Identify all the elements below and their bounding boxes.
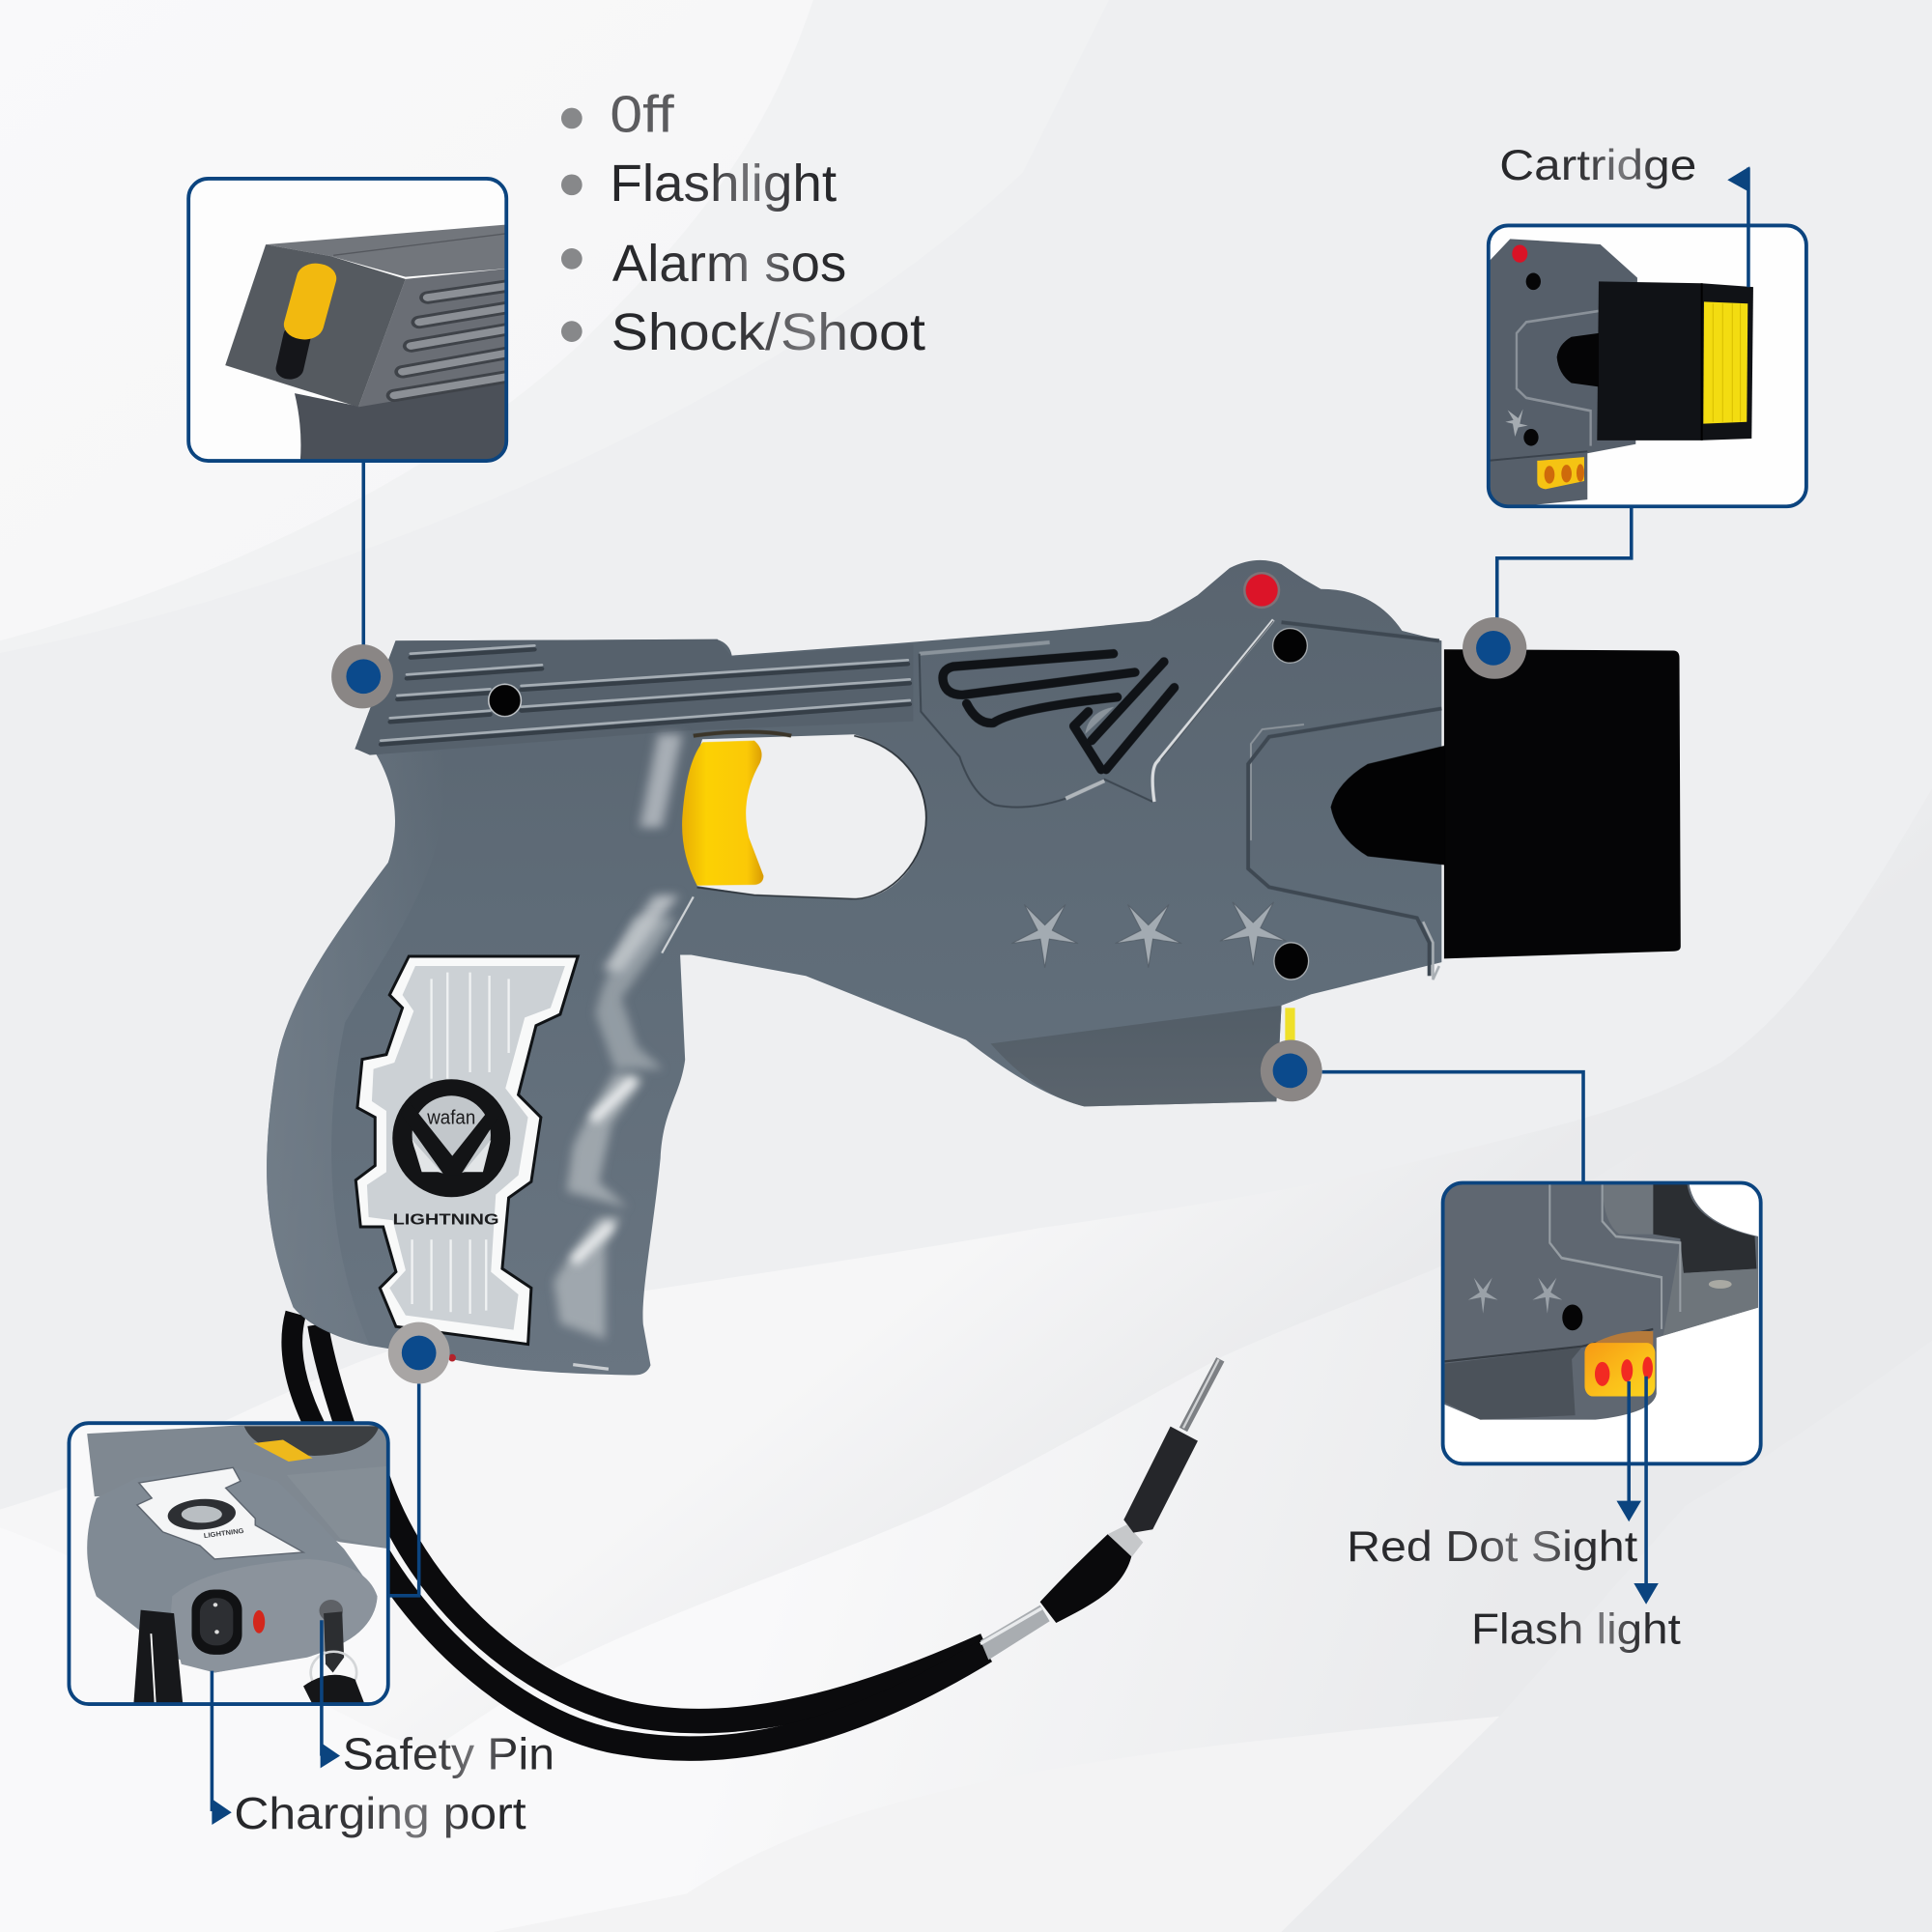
port bbox=[191, 1590, 242, 1655]
trigger hole bbox=[244, 1426, 379, 1456]
mode: shock: Shock/Shoot bbox=[611, 304, 925, 361]
rear slide hole bbox=[489, 684, 521, 717]
bullets bbox=[561, 108, 582, 342]
arrow: charging port bbox=[212, 1671, 232, 1825]
wing strokes bbox=[943, 654, 1175, 770]
marker: flash bbox=[1261, 1040, 1322, 1101]
top surface bbox=[266, 224, 511, 277]
silver badge: LIGHTNING bbox=[393, 1211, 499, 1228]
trigger highlights bbox=[603, 734, 682, 973]
body shell bbox=[267, 560, 1441, 1375]
lower underbody bbox=[991, 1006, 1282, 1106]
rib panel bbox=[358, 269, 511, 407]
connector: cartridge bbox=[1497, 508, 1632, 622]
lamp bbox=[1537, 457, 1584, 489]
stun gun body bbox=[267, 560, 1445, 1375]
front raised panel bbox=[1248, 622, 1441, 976]
yellow switch bbox=[284, 263, 336, 340]
red dot bbox=[1512, 244, 1527, 263]
notch bbox=[1557, 333, 1599, 386]
slide and trigger guard detail bbox=[355, 639, 926, 973]
mode: off: 0ff bbox=[610, 86, 674, 143]
slot bbox=[276, 330, 311, 380]
lit lamp bbox=[1584, 1343, 1655, 1397]
front face bbox=[225, 244, 406, 407]
connector: switch bbox=[362, 462, 365, 648]
inset panel: charging port: LIGHTNING bbox=[203, 1526, 244, 1540]
lanyard end fittings bbox=[980, 1359, 1220, 1660]
lamp glow bbox=[1592, 1331, 1653, 1347]
holes bbox=[1273, 629, 1309, 980]
body bbox=[1439, 1179, 1758, 1420]
label: red dot sight: Red Dot Sight bbox=[1347, 1523, 1638, 1571]
grip rear shading bbox=[267, 752, 445, 1346]
arrow: red dot sight bbox=[1616, 1381, 1641, 1521]
flashlight edge bbox=[1285, 1008, 1295, 1042]
grip texture bbox=[554, 918, 676, 1369]
silver crease bbox=[1152, 620, 1273, 802]
mode: alarm: Alarm sos bbox=[612, 236, 846, 293]
badge bbox=[137, 1467, 303, 1559]
safety pin bbox=[319, 1600, 343, 1622]
silver badge: wafan bbox=[426, 1106, 475, 1128]
connector: flash bbox=[1322, 1072, 1583, 1182]
mini clip bbox=[1709, 1280, 1732, 1289]
gray housing bbox=[1488, 239, 1637, 505]
inset panel: cartridge bbox=[1488, 225, 1806, 506]
label: charging port: Charging port bbox=[234, 1788, 526, 1838]
arrow: safety pin bbox=[321, 1620, 340, 1768]
label: cartridge: Cartridge bbox=[1499, 142, 1696, 189]
bottom shade bbox=[1445, 1348, 1582, 1420]
lanyard cord bbox=[292, 1314, 1220, 1748]
arrow: cartridge bbox=[1727, 166, 1749, 287]
cartridge (main device) bbox=[1444, 649, 1681, 958]
yellow probes bbox=[1703, 301, 1747, 424]
red indicator bbox=[1243, 572, 1280, 609]
black block bbox=[1597, 281, 1753, 440]
raised panel bbox=[1517, 311, 1599, 446]
muzzle notch bbox=[1331, 746, 1445, 865]
panel edge bbox=[1549, 1182, 1680, 1329]
inset panel: charging port bbox=[69, 1423, 390, 1708]
frame panel bbox=[287, 1466, 390, 1548]
mode list bbox=[561, 86, 925, 361]
emblem and wing bbox=[920, 620, 1304, 840]
inset panel: selector switch bbox=[188, 179, 511, 463]
lower right frame bbox=[1663, 1243, 1758, 1336]
marker: base bbox=[388, 1322, 450, 1383]
trigger bbox=[682, 741, 763, 886]
arrow: flash light bbox=[1634, 1377, 1659, 1605]
trigger bbox=[253, 1439, 313, 1462]
slide band bbox=[355, 639, 913, 755]
stars bbox=[1011, 902, 1287, 968]
butt bbox=[170, 1559, 378, 1672]
red pin tip bbox=[448, 1354, 456, 1361]
marker: cartridge bbox=[1463, 617, 1526, 679]
label: safety pin: Safety Pin bbox=[343, 1729, 554, 1779]
charge led bbox=[253, 1610, 265, 1634]
grip bbox=[87, 1495, 377, 1673]
hole rear edge bbox=[697, 736, 926, 899]
label: flash light: Flash light bbox=[1471, 1606, 1681, 1654]
grip below switch bbox=[295, 384, 504, 460]
front panel corner bbox=[1251, 724, 1304, 840]
seal bbox=[392, 1079, 510, 1197]
marker: switch bbox=[331, 644, 393, 708]
inset panel: flash light bbox=[1439, 1179, 1761, 1463]
silver badge bbox=[355, 956, 578, 1345]
rear gun body bbox=[87, 1425, 390, 1548]
connector: charging inset bbox=[389, 1383, 419, 1596]
mode: flashlight: Flashlight bbox=[610, 156, 837, 213]
ribs bbox=[394, 286, 511, 395]
cords bbox=[303, 1675, 364, 1702]
dark recess bbox=[1653, 1182, 1756, 1273]
stars bbox=[1468, 1278, 1562, 1314]
star bbox=[1505, 409, 1528, 437]
seal bbox=[168, 1499, 236, 1530]
